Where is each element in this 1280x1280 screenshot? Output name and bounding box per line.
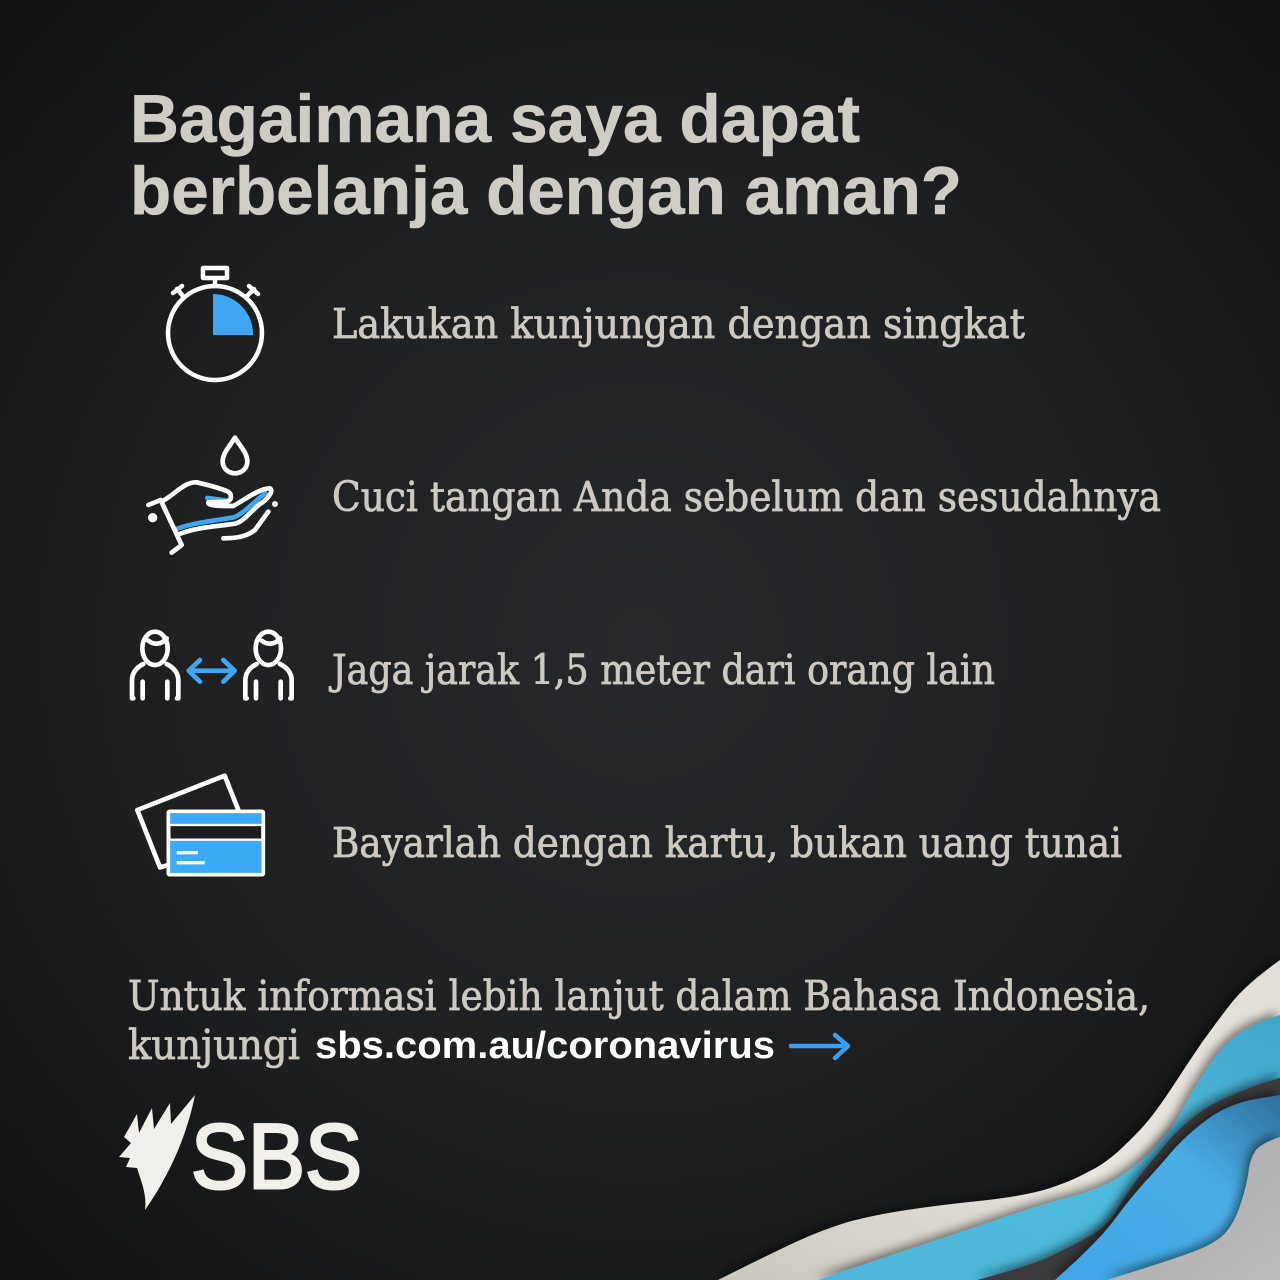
logo: SBS: SBS [191, 1106, 362, 1208]
text: short visit: Lakukan kunjungan dengan singkat [332, 300, 1025, 348]
icon: stopwatch [168, 268, 262, 380]
title [130, 81, 962, 229]
footer information text: sbs.com.au/coronavirus [315, 1025, 775, 1067]
arrow: link pointer [791, 1035, 848, 1058]
footer information text: kunjungi [128, 1021, 300, 1069]
text: pay by card: Bayarlah dengan kartu, bukan uang tunai [332, 819, 1122, 867]
decorative paper waves [718, 960, 1280, 1280]
title: Bagaimana saya dapat [130, 81, 860, 157]
icon: payment cards [137, 776, 263, 875]
text: wash hands: Cuci tangan Anda sebelum dan sesudahnya [332, 473, 1161, 521]
icon: two people with distance arrow [132, 632, 292, 698]
title: berbelanja dengan aman? [130, 153, 962, 229]
footer information text: Untuk informasi lebih lanjut dalam Bahasa Indonesia, [128, 972, 1150, 1020]
footer information text [128, 972, 1150, 1069]
text: keep distance: Jaga jarak 1,5 meter dari orang lain [328, 646, 995, 694]
icon: washing hand with water drop [148, 438, 278, 553]
logo: SBS [119, 1095, 362, 1210]
